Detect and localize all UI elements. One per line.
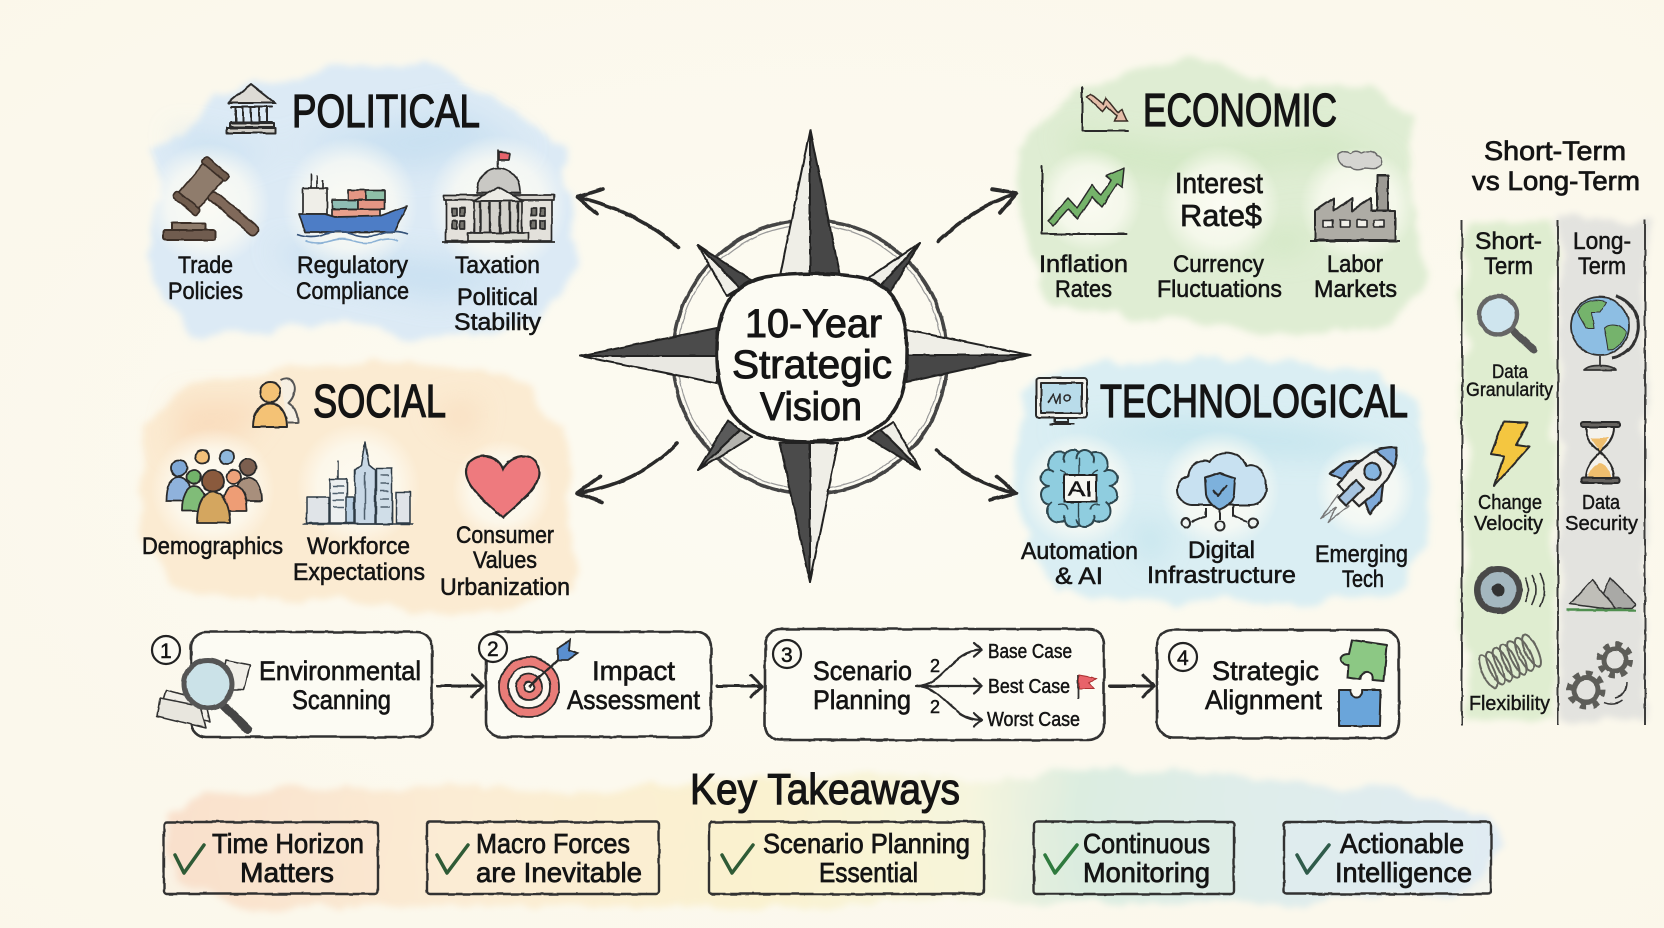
center box: [717, 274, 907, 441]
label: automation and AI: & AI: [1055, 563, 1103, 590]
side heading: [1472, 136, 1640, 196]
icon: vision lens: [1477, 569, 1544, 611]
icon: lightning bolt: [1491, 422, 1529, 486]
step 4 label: Alignment: [1205, 685, 1322, 715]
label: regulatory compliance: Regulatory: [297, 252, 408, 279]
fork marks: 2: [930, 697, 940, 717]
takeaway: macro forces are inevitable: [427, 822, 659, 894]
short-term column wash: [1465, 222, 1555, 720]
process: step 1 environmental scanning: [152, 632, 432, 737]
icon: capitol building: [442, 150, 555, 242]
label: consumer values urbanization: Values: [473, 547, 537, 574]
takeaway: actionable intelligence: Intelligence: [1335, 857, 1472, 888]
arrow: to economic: [938, 189, 1017, 241]
side heading: Short-Term: [1484, 136, 1626, 166]
side heading: vs Long-Term: [1472, 166, 1640, 196]
takeaway: continuous monitoring: [1034, 822, 1234, 894]
label: trade policies: [168, 252, 243, 305]
text: interest rates: [1175, 168, 1263, 233]
panel: short-term vs long-term: [1462, 136, 1646, 725]
process: step 4 strategic alignment: [1157, 630, 1399, 738]
step 3 number: 3: [781, 644, 793, 667]
heading: economic: ECONOMIC: [1143, 84, 1337, 136]
label: workforce expectations: Expectations: [293, 559, 425, 586]
step 2 number: 2: [487, 638, 499, 661]
label: currency fluctuations: [1157, 251, 1282, 303]
label: digital infrastructure: Infrastructure: [1147, 562, 1296, 589]
central compass: [580, 130, 1030, 582]
political watercolor wash: [147, 62, 575, 335]
section: key takeaways: [164, 765, 1505, 908]
heading: social: SOCIAL: [313, 375, 446, 427]
title: 10-year strategic vision: Strategic: [732, 343, 892, 387]
column header: long-term: Long-: [1573, 228, 1631, 255]
label: data granularity: [1466, 362, 1553, 401]
step 1 box: [191, 632, 432, 737]
label: emerging tech: Emerging: [1315, 541, 1408, 568]
step 1 label: Environmental: [259, 656, 421, 686]
icon: two people: [253, 378, 298, 427]
process: step 2 impact assessment: [479, 632, 711, 737]
step 1 number: [152, 636, 180, 664]
label: data granularity: Data: [1492, 362, 1528, 383]
icon: gears: [1570, 645, 1630, 706]
title: 10-year strategic vision: [732, 302, 892, 429]
label: taxation, political stability: Stability: [454, 309, 541, 336]
heading: technological: TECHNOLOGICAL: [1100, 375, 1408, 427]
label: inflation rates: Rates: [1055, 276, 1112, 303]
takeaway: macro forces are inevitable: are Inevitable: [476, 857, 642, 888]
step 4 label: [1205, 656, 1322, 715]
column header: short-term: Short-: [1475, 228, 1542, 255]
takeaways heading: Key Takeaways: [690, 765, 960, 814]
takeaways wash: [168, 768, 1505, 908]
arrow: to social: [577, 443, 677, 502]
scenario labels: Base Case: [988, 641, 1072, 663]
panel: economic: [1018, 60, 1424, 338]
step 4 box: [1157, 630, 1399, 738]
label: labor markets: Markets: [1314, 276, 1397, 303]
step 4 number: [1169, 643, 1197, 671]
step 4 label: Strategic: [1212, 656, 1319, 686]
takeaway: time horizon matters: Time Horizon: [212, 828, 364, 859]
arrow: step 3 to 4: [1110, 675, 1154, 697]
label: currency fluctuations: Currency: [1173, 251, 1264, 278]
title: 10-year strategic vision: Vision: [760, 385, 862, 429]
label: automation and AI: [1021, 538, 1138, 590]
label: change velocity: [1474, 492, 1543, 535]
takeaway: scenario planning essential: Scenario Planning: [763, 828, 970, 859]
heading: political: POLITICAL: [292, 85, 480, 137]
icon: spring: [1475, 632, 1545, 690]
label: consumer values urbanization: Urbanization: [440, 574, 570, 601]
icon: magnifier over papers: [157, 660, 250, 730]
step 2 label: Assessment: [567, 685, 700, 715]
label: labor markets: [1314, 251, 1397, 303]
column header: short-term: Term: [1484, 253, 1533, 280]
panel: technological: [1012, 358, 1430, 604]
text: interest rates: Rate$: [1180, 198, 1262, 233]
label: taxation, political stability: Taxation: [455, 252, 540, 279]
step 2 label: Impact: [592, 656, 676, 686]
column header: long-term: [1573, 228, 1631, 280]
takeaway: actionable intelligence: Actionable: [1340, 828, 1464, 859]
title: 10-year strategic vision: 10-Year: [745, 302, 882, 346]
takeaway: scenario planning essential: Essential: [819, 857, 918, 888]
icon: monitor: [1036, 378, 1087, 424]
compass star points: [580, 130, 1030, 582]
icon: mountains: [1567, 578, 1636, 610]
label: workforce expectations: [293, 533, 425, 586]
takeaway: continuous monitoring: Continuous: [1083, 828, 1210, 859]
step 2 box: [486, 632, 711, 737]
takeaway: time horizon matters: [164, 822, 378, 894]
technological watercolor wash: [1012, 358, 1430, 604]
economic watercolor wash: [1018, 60, 1424, 338]
icon: gavel: [163, 156, 274, 253]
step 1 label: Scanning: [292, 685, 391, 715]
step 1 number: 1: [160, 640, 172, 663]
label: automation and AI: Automation: [1021, 538, 1138, 565]
label: data security: Data: [1582, 492, 1621, 514]
long-term column wash: [1560, 218, 1646, 720]
icon: rocket: [1303, 427, 1417, 541]
step 2 number: [479, 634, 507, 662]
step 3 label: [813, 656, 912, 715]
column header: long-term: Term: [1578, 253, 1626, 280]
label: digital infrastructure: [1147, 537, 1296, 589]
label: taxation, political stability: Political: [457, 284, 538, 311]
icon: AI brain: [1041, 450, 1117, 527]
label: inflation rates: [1039, 251, 1128, 303]
label: data security: [1565, 492, 1638, 535]
scenario labels: Best Case: [988, 676, 1070, 698]
label: trade policies: Trade: [178, 252, 233, 279]
process: step 3 scenario planning: [765, 629, 1104, 740]
step 3 box: [765, 629, 1104, 740]
text: interest rates: Interest: [1175, 168, 1263, 200]
label: consumer values urbanization: Consumer: [456, 522, 554, 549]
icon: city skyline: [303, 442, 413, 524]
label: regulatory compliance: Compliance: [296, 278, 409, 305]
icon: container ship: [297, 174, 408, 243]
takeaway: scenario planning essential: [709, 822, 984, 894]
icon: hourglass: [1581, 422, 1620, 483]
fork marks: [930, 656, 940, 717]
column header: short-term: [1475, 228, 1542, 280]
label: currency fluctuations: Fluctuations: [1157, 276, 1282, 303]
label: emerging tech: Tech: [1342, 566, 1384, 593]
arrow: step 2 to 3: [717, 675, 762, 697]
icon: globe: [1571, 296, 1638, 370]
step 3 label: Scenario: [813, 656, 912, 686]
step 3 label: Planning: [813, 685, 911, 715]
label: labor markets: Labor: [1327, 251, 1383, 278]
column rules: [1462, 220, 1645, 725]
icon: falling chart: [1082, 87, 1128, 131]
label: taxation, political stability: [454, 252, 541, 336]
step 3 number: [773, 640, 801, 668]
label: flexibility: Flexibility: [1469, 693, 1550, 715]
icon: target: [499, 640, 578, 717]
icon: heart: [466, 456, 539, 518]
step 1 label: [259, 656, 421, 715]
icon: puzzle pieces: [1339, 640, 1387, 726]
panel: social: [142, 362, 575, 612]
takeaway: actionable intelligence: [1284, 822, 1491, 894]
compass ring: [673, 220, 947, 494]
arrow: to political: [577, 189, 678, 247]
arrow: step 1 to 2: [438, 675, 483, 697]
fork marks: 2: [930, 656, 940, 676]
scenario labels: Worst Case: [987, 709, 1080, 731]
icon: inflation chart: [1042, 166, 1127, 234]
icon: factory: [1310, 151, 1400, 241]
label: trade policies: Policies: [168, 278, 243, 305]
label: regulatory compliance: [296, 252, 409, 305]
takeaway: continuous monitoring: Monitoring: [1083, 857, 1210, 888]
scenario labels: [987, 641, 1080, 731]
icon: red flag: [1078, 675, 1096, 699]
step 2 label: [567, 656, 700, 715]
label: inflation rates: Inflation: [1039, 251, 1128, 278]
icon: temple: [227, 84, 276, 133]
takeaway: macro forces are inevitable: Macro Forces: [476, 828, 630, 859]
label: change velocity: Velocity: [1474, 513, 1543, 535]
icon: cloud with shield: [1177, 453, 1266, 530]
scenario fork arrows: [916, 643, 982, 727]
icon: magnifier: [1479, 296, 1534, 350]
icon: crowd: [166, 450, 262, 523]
label: workforce expectations: Workforce: [307, 533, 410, 560]
label: change velocity: Change: [1478, 492, 1542, 514]
icon: AI brain: AI: [1068, 478, 1092, 501]
label: consumer values urbanization: [440, 522, 570, 601]
label: emerging tech: [1315, 541, 1408, 593]
label: data granularity: Granularity: [1466, 380, 1553, 401]
social watercolor wash: [142, 362, 575, 612]
arrow: to technological: [937, 450, 1016, 500]
panel: political: [146, 62, 575, 336]
label: digital infrastructure: Digital: [1188, 537, 1255, 564]
label: demographics: Demographics: [142, 533, 283, 560]
takeaway: time horizon matters: Matters: [240, 857, 334, 888]
label: data security: Security: [1565, 513, 1638, 535]
step 4 number: 4: [1177, 647, 1189, 670]
